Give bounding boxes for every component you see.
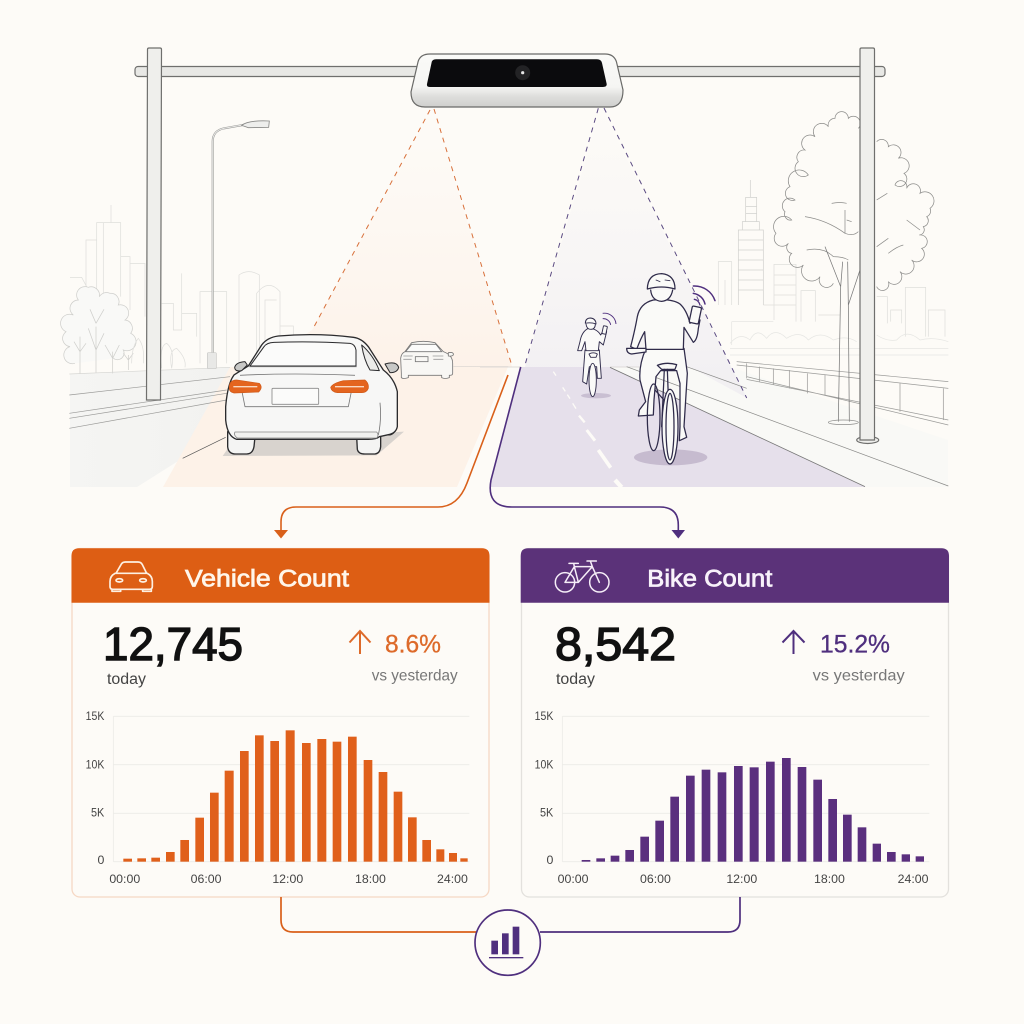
camera sensor — [411, 54, 623, 107]
heading: vehicle count: Vehicle Count — [185, 566, 349, 593]
panel: vehicle count — [72, 548, 490, 897]
icon: car — [110, 562, 152, 591]
bar chart: bikes by hour — [535, 709, 929, 886]
bike change percent: 15.2% — [820, 631, 890, 659]
bar chart: bikes by hour: 5K — [540, 806, 554, 820]
vehicle sensor beam — [260, 108, 512, 367]
bike lane — [490, 367, 865, 487]
orange link to summary — [281, 897, 476, 932]
distant cyclist — [578, 313, 616, 398]
distant car — [401, 341, 453, 378]
foreground cyclist — [627, 274, 715, 465]
bar chart: bikes by hour: 24:00 — [898, 872, 929, 886]
bar chart: bikes by hour: 12:00 — [726, 872, 757, 886]
bike lane markings — [480, 367, 948, 487]
guard rail — [737, 362, 948, 425]
vehicle comparison label: vs yesterday — [372, 668, 458, 685]
street scene — [61, 48, 948, 538]
left road lines — [69, 367, 508, 458]
vehicle total: 12,745 — [103, 618, 243, 670]
vehicle lane edge and vehicle connector — [281, 375, 508, 531]
right gantry pole — [857, 48, 879, 444]
large tree — [774, 112, 934, 425]
bar chart: bikes by hour: 18:00 — [814, 872, 845, 886]
right skyline — [718, 180, 948, 355]
icon: summary bar chart badge — [475, 910, 540, 975]
bar chart: vehicles by hour: 0 — [97, 853, 104, 867]
connector arrowhead purple — [672, 530, 685, 538]
bar chart: vehicles by hour: 18:00 — [355, 872, 386, 886]
street lamp — [207, 121, 269, 369]
panel: bike count — [521, 548, 949, 897]
vehicle change percent: 8.6% — [385, 631, 441, 659]
right roadside ground — [610, 367, 948, 487]
bike total: 8,542 — [555, 618, 676, 670]
bar chart: bikes by hour: 0 — [546, 853, 553, 867]
left gantry pole — [146, 48, 162, 400]
bar chart: vehicles by hour: 00:00 — [109, 872, 140, 886]
icon: up arrow orange — [350, 631, 370, 654]
purple link to summary — [540, 897, 740, 932]
panel header — [72, 548, 490, 603]
heading: bike count: Bike Count — [647, 566, 773, 593]
bar chart: vehicles by hour — [86, 709, 469, 886]
bar chart: bikes by hour: 10K — [535, 758, 554, 772]
icon: bicycle — [555, 561, 609, 592]
left skyline and trees — [61, 205, 293, 374]
foreground car — [223, 335, 404, 456]
bar chart: vehicles by hour: 12:00 — [272, 872, 303, 886]
panel card — [72, 548, 489, 897]
panel card — [522, 548, 948, 897]
panel header — [521, 548, 949, 603]
bike sensor beam — [525, 108, 747, 398]
vehicle beam dashed edges — [312, 109, 512, 365]
bar chart: vehicles by hour: 5K — [91, 806, 105, 820]
bar chart: vehicles by hour: 24:00 — [437, 872, 468, 886]
left large tree — [61, 287, 136, 364]
bar chart: vehicles by hour: 10K — [86, 758, 105, 772]
bike comparison label: vs yesterday — [813, 668, 905, 685]
icon: up arrow purple — [782, 631, 804, 654]
bar chart: vehicles by hour: 06:00 — [191, 872, 222, 886]
bike beam dashed edges — [525, 108, 747, 398]
bike today label: today — [556, 671, 595, 688]
connector arrowhead orange — [274, 530, 288, 538]
bar chart: bikes by hour: 15K — [535, 709, 554, 723]
left roadside ground — [70, 367, 230, 487]
bar chart: bikes by hour: 00:00 — [558, 872, 589, 886]
bar chart: bikes by hour: 06:00 — [640, 872, 671, 886]
bike lane edge and bike connector — [490, 367, 678, 531]
vehicle today label: today — [107, 671, 146, 688]
gantry crossbar — [135, 66, 885, 76]
bar chart: vehicles by hour: 15K — [86, 709, 105, 723]
vehicle lane — [163, 367, 508, 487]
